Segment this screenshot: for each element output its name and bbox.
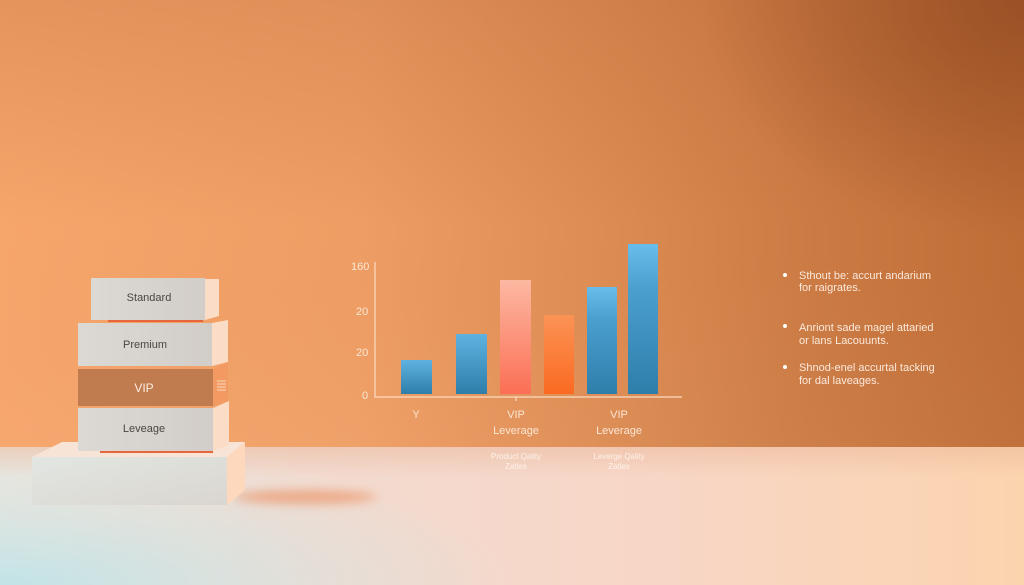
footnote labels: Zatles: [505, 462, 527, 471]
y axis labels: 20: [356, 347, 368, 359]
block: Premium: Premium: [123, 339, 167, 351]
y axis labels: 160: [351, 261, 369, 273]
x axis labels: VIP: [610, 409, 628, 421]
x axis labels: Leverage: [596, 425, 642, 437]
note 1: Sthout be: accurt andarium: [799, 270, 931, 282]
note 2: Anriont sade magel attaried: [799, 322, 934, 334]
y axis labels: [351, 261, 369, 402]
note 2: or lans Lacouunts.: [799, 335, 889, 347]
base block: [32, 442, 245, 505]
note 1: [783, 270, 931, 294]
x axis labels: [412, 409, 642, 437]
block: VIP: [78, 362, 228, 406]
footnote labels: Zatles: [608, 462, 630, 471]
block: Leverage: Leveage: [123, 423, 165, 435]
block: Premium: [78, 320, 228, 366]
footnote labels: Product Qality: [491, 452, 541, 461]
block: Standard: [91, 278, 219, 322]
bullet notes: [783, 270, 935, 387]
block: Leverage: [78, 401, 229, 453]
footnote labels: Leverge Qality: [593, 452, 645, 461]
note 3: for dal laveages.: [799, 375, 880, 387]
note 1: for raigrates.: [799, 282, 861, 294]
x axis labels: Y: [412, 409, 420, 421]
x axis labels: VIP: [507, 409, 525, 421]
background wall: [0, 0, 1024, 448]
y axis labels: 20: [356, 306, 368, 318]
stacked tier blocks: [32, 278, 245, 505]
note 3: [783, 362, 935, 387]
block: Standard: Standard: [127, 292, 171, 304]
x axis labels: Leverage: [493, 425, 539, 437]
bars: [401, 244, 658, 394]
floor: [0, 447, 1024, 585]
note 2: [783, 322, 934, 347]
y axis labels: 0: [362, 390, 368, 402]
note 3: Shnod-enel accurtal tacking: [799, 362, 935, 374]
axes: [375, 262, 682, 401]
bar chart: [351, 244, 682, 471]
block: VIP: VIP: [134, 381, 154, 395]
footnote labels: [491, 452, 645, 471]
